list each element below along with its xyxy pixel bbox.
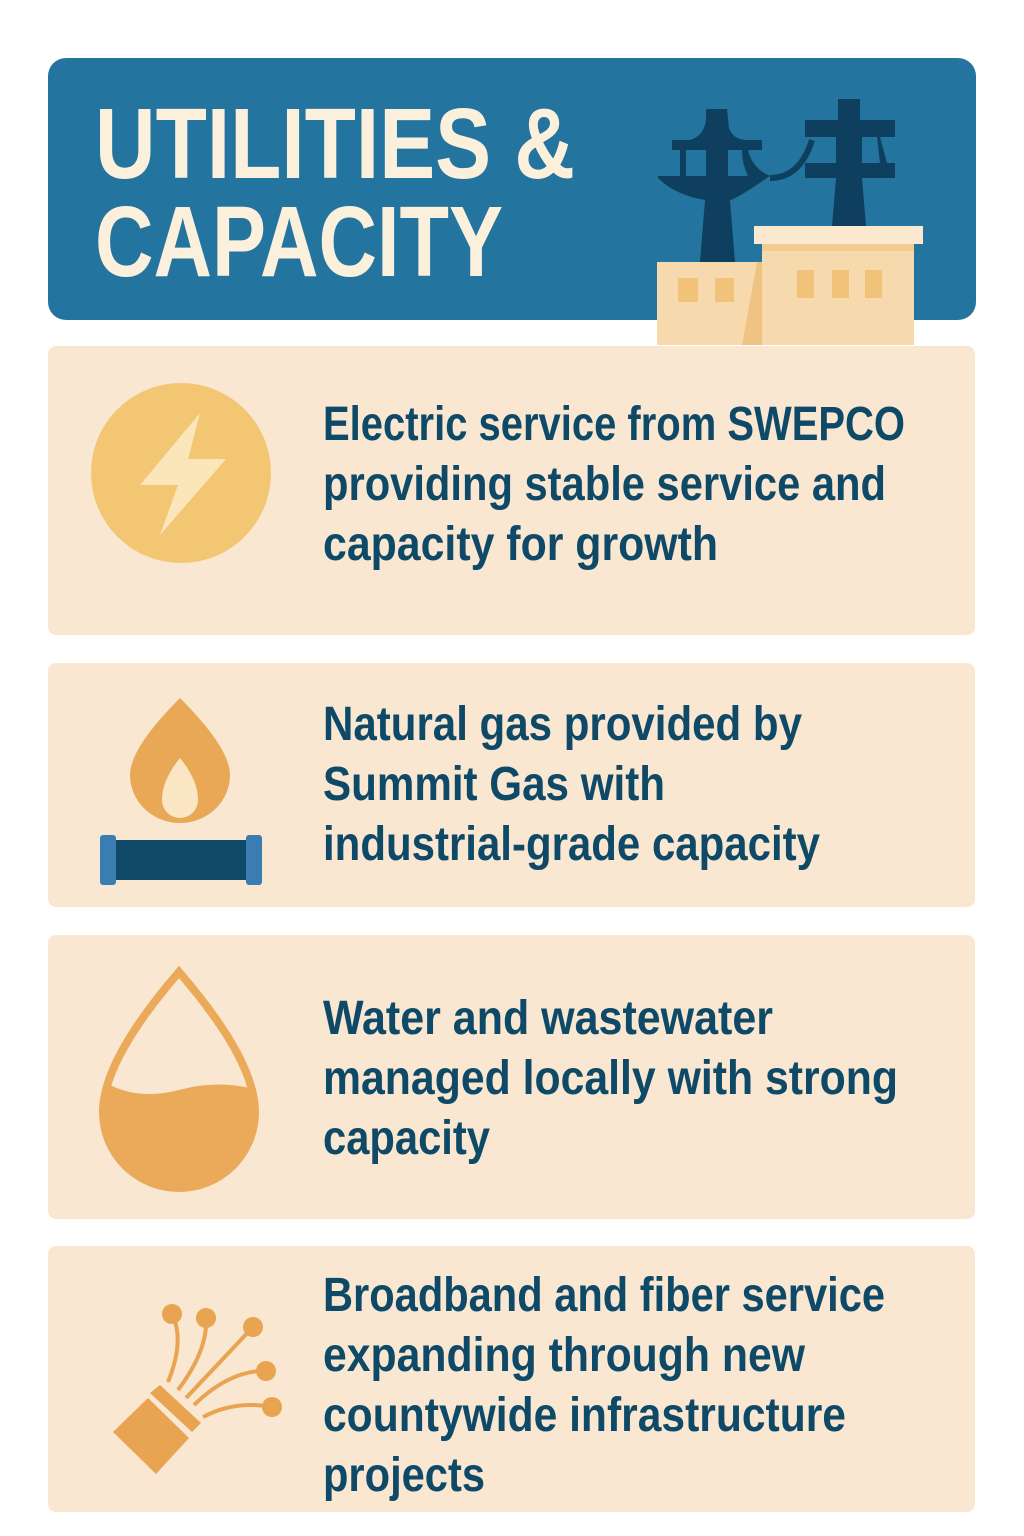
text: broadband: Broadband and fiber service [323, 1269, 885, 1322]
icon: water drop [103, 972, 255, 1188]
title: CAPACITY [95, 186, 503, 298]
title: UTILITIES & [95, 88, 575, 200]
text: electric: capacity for growth [323, 518, 718, 571]
text: broadband: expanding through new [323, 1329, 806, 1382]
text: broadband: countywide infrastructure [323, 1389, 846, 1442]
icon: lightning [91, 383, 271, 563]
panel: gas [48, 663, 975, 907]
text: water: Water and wastewater [323, 992, 773, 1045]
text: broadband [323, 1269, 885, 1502]
icon: flame and pipe [100, 698, 262, 885]
panel: broadband [48, 1246, 975, 1512]
text: gas [323, 698, 820, 871]
panel: electric [48, 346, 975, 635]
text: electric: providing stable service and [323, 458, 886, 511]
header panel [48, 58, 976, 320]
text: broadband: projects [323, 1449, 485, 1502]
text: water [323, 992, 898, 1165]
title [95, 88, 575, 298]
text: gas: Natural gas provided by [323, 698, 802, 751]
text: electric: Electric service from SWEPCO [323, 398, 905, 451]
panel: water [48, 935, 975, 1219]
text: water: capacity [323, 1112, 490, 1165]
text: water: managed locally with strong [323, 1052, 898, 1105]
text: electric [323, 398, 905, 571]
text: gas: industrial-grade capacity [323, 818, 820, 871]
icon: power towers and buildings [657, 99, 923, 345]
icon: fiber cable [113, 1304, 282, 1474]
text: gas: Summit Gas with [323, 758, 665, 811]
